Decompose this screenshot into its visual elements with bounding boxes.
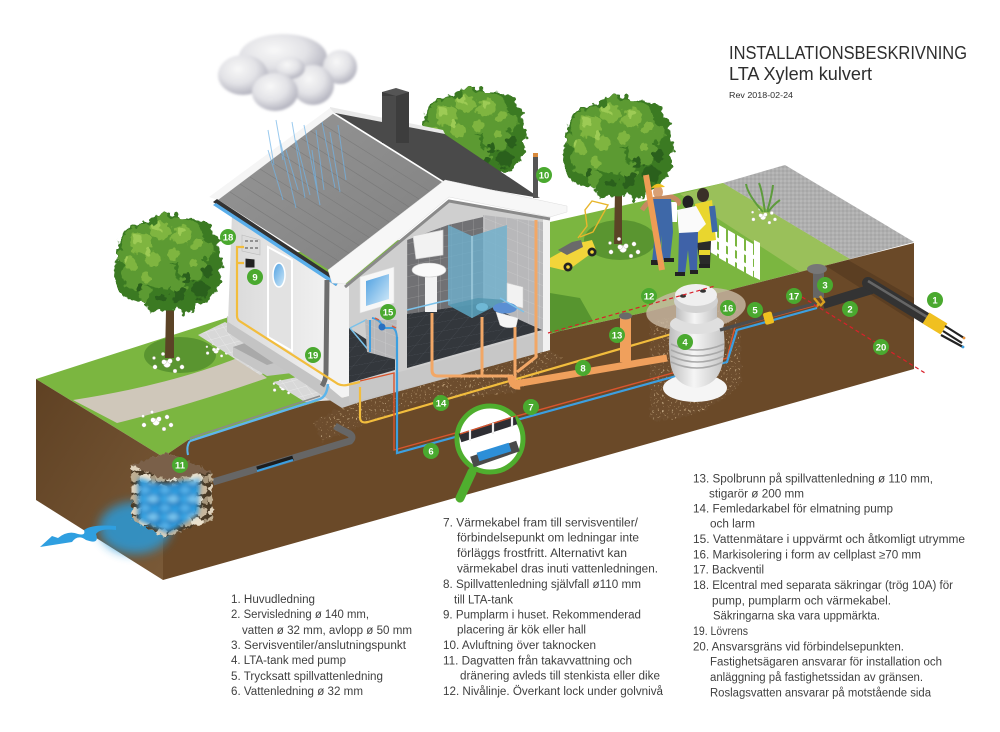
yellow coupling xyxy=(763,311,774,325)
rain xyxy=(268,120,346,208)
legend column 1: 1. Huvudledning xyxy=(231,594,315,606)
badge 1: 1 xyxy=(932,296,938,306)
LTA tank xyxy=(663,284,727,402)
worker in hi-vis xyxy=(695,188,716,268)
gravel road xyxy=(723,165,914,259)
cloud xyxy=(218,34,357,111)
badge 1 xyxy=(927,292,943,308)
badge 10: 10 xyxy=(539,170,549,182)
water pipe xyxy=(397,308,817,453)
title xyxy=(729,43,967,100)
badge 12: 12 xyxy=(644,292,654,302)
tree left of house xyxy=(115,213,223,373)
house: gable fascia xyxy=(328,180,567,284)
badge 19: 19 xyxy=(308,350,318,362)
power cable along wall and to tank xyxy=(237,247,675,422)
house: slab xyxy=(349,332,550,403)
legend column 3: 13. Spolbrunn på spillvattenledning ø 110 mm, xyxy=(693,473,933,485)
house: floor drain cup xyxy=(476,303,488,311)
legend column 2: placering är kök eller hall xyxy=(457,625,586,637)
level line xyxy=(548,286,715,333)
legend column 2: 10. Avluftning över taknocken xyxy=(443,640,596,652)
badge 5: 5 xyxy=(752,306,758,316)
house: front corner pillar xyxy=(330,277,349,398)
legend column 3: Säkringarna ska vara uppmärkta. xyxy=(713,611,880,623)
badge 9: 9 xyxy=(252,272,258,284)
badge 6 xyxy=(423,443,439,459)
badge 20 xyxy=(873,339,889,355)
ground: grass surface xyxy=(36,183,850,457)
house: right tile wall xyxy=(483,215,543,332)
legend column 3: Fastighetsägaren ansvarar för installation och xyxy=(710,657,942,669)
legend column 3: och larm xyxy=(710,519,755,531)
gravel bed around tank xyxy=(650,300,742,420)
badge 3: 3 xyxy=(822,280,828,292)
badge 11 xyxy=(172,457,188,473)
service valve post xyxy=(807,264,827,307)
heat cable xyxy=(360,305,817,450)
house: side wall xyxy=(228,214,332,388)
badge 16: 16 xyxy=(723,304,733,314)
badge 14 xyxy=(433,395,449,411)
legend column 2: till LTA-tank xyxy=(454,594,513,606)
legend column 1 xyxy=(231,594,412,698)
title: INSTALLATIONSBESKRIVNING xyxy=(729,43,967,63)
tree behind house xyxy=(421,87,527,190)
badge 2: 2 xyxy=(847,304,853,316)
legend column 3: 16. Markisolering i form av cellplast ≥70 mm xyxy=(693,549,921,561)
legend column 1: 3. Servisventiler/anslutningspunkt xyxy=(231,640,407,652)
house: mirror cabinet xyxy=(413,230,443,259)
ground: light lawn strip near gravel xyxy=(680,183,850,272)
badge 13: 13 xyxy=(612,330,622,342)
storm drain along ground xyxy=(187,384,328,455)
legend column 2: 12. Nivålinje. Överkant lock under golvnivå xyxy=(443,686,664,698)
house: downpipe xyxy=(322,280,327,386)
main pipe and service pipe xyxy=(823,281,965,348)
house: door xyxy=(268,247,292,351)
title: LTA Xylem kulvert xyxy=(729,64,872,84)
badge 9 xyxy=(247,269,263,285)
pavement and entrance steps xyxy=(198,322,337,402)
legend column 2: 11. Dagvatten från takavvattning och xyxy=(443,655,632,667)
number badges xyxy=(172,167,943,473)
fascia underside xyxy=(345,201,550,287)
legend column 2: förläggs frostfritt. Alternativt kan xyxy=(457,548,627,560)
house: dark tile wall xyxy=(407,217,483,314)
house: floor room 1 xyxy=(407,303,542,368)
house: right end wall xyxy=(543,218,550,352)
reed plant xyxy=(746,183,780,212)
house: foundation xyxy=(227,316,550,408)
house: pump alarm xyxy=(245,258,255,268)
stone chest xyxy=(131,453,213,537)
badge 17: 17 xyxy=(789,292,799,302)
legend column 2: 7. Värmekabel fram till servisventiler/ xyxy=(443,517,639,529)
house: roof ridge trim xyxy=(330,107,445,134)
badge 15 xyxy=(380,304,396,320)
badge 4 xyxy=(677,334,693,350)
white fence xyxy=(671,202,760,280)
outflow arrow xyxy=(40,526,116,547)
legend column 3: 17. Backventil xyxy=(693,565,764,577)
badge 3 xyxy=(817,277,833,293)
badge 17 xyxy=(786,288,802,304)
sewer pipe xyxy=(511,358,667,386)
badge 12 xyxy=(641,288,657,304)
badge 4: 4 xyxy=(682,338,688,348)
house: water meter niche xyxy=(365,318,397,360)
house: toilet xyxy=(493,283,523,328)
roof lines xyxy=(230,122,429,262)
ground insulation disc xyxy=(644,283,748,335)
house: gutter xyxy=(213,199,340,286)
garden path xyxy=(73,357,267,423)
orange drain pipes in house xyxy=(432,220,536,385)
legend column 3: stigarör ø 200 mm xyxy=(709,488,804,500)
badge 13 xyxy=(609,327,625,343)
legend column 3: 19. Lövrens xyxy=(693,626,748,638)
house: interior wall xyxy=(345,200,550,392)
badge 16 xyxy=(720,300,736,316)
legend column 3 xyxy=(693,473,965,699)
magnifier xyxy=(457,406,523,498)
house: electrical panel xyxy=(242,235,260,255)
badge 2 xyxy=(842,301,858,317)
badge 6: 6 xyxy=(428,446,434,458)
badge 14: 14 xyxy=(436,398,447,410)
legend column 3: pump, pumplarm och värmekabel. xyxy=(712,595,891,607)
badge 8: 8 xyxy=(580,364,586,374)
legend column 2: 8. Spillvattenledning självfall ø110 mm xyxy=(443,579,641,591)
legend column 3: 15. Vattenmätare i uppvärmt och åtkomligt utrymme xyxy=(693,534,965,546)
responsibility boundary line xyxy=(802,297,925,373)
soil: front face xyxy=(163,243,914,580)
legend column 3: anläggning på fastighetssidan av gränsen. xyxy=(710,672,923,684)
worker in white shirt xyxy=(675,196,706,276)
underground drain pipe xyxy=(213,426,352,482)
house: roof rake xyxy=(209,108,334,200)
ground: lawn shadow xyxy=(550,293,593,333)
legend column 2: värmekabel dras inuti vattenledningen. xyxy=(457,564,658,576)
legend column 1: vatten ø 32 mm, avlopp ø 50 mm xyxy=(242,625,412,637)
house: wash basin xyxy=(412,263,446,312)
house: chimney xyxy=(382,88,409,143)
flushing well riser xyxy=(619,312,632,362)
badge 19 xyxy=(305,347,321,363)
badge 18 xyxy=(220,229,236,245)
gravel bed under house xyxy=(313,350,562,442)
badge 20: 20 xyxy=(876,342,886,354)
badge 11: 11 xyxy=(175,460,186,472)
worker with pipe xyxy=(642,184,679,265)
badge 7 xyxy=(523,399,539,415)
legend column 3: 14. Femledarkabel för elmatning pump xyxy=(693,504,893,516)
legend column 1: 4. LTA-tank med pump xyxy=(231,655,346,667)
trench shadow xyxy=(826,260,914,322)
flowers xyxy=(141,208,777,431)
legend column 1: 5. Trycksatt spillvattenledning xyxy=(231,671,383,683)
house: shower glass xyxy=(448,225,507,318)
badge 8 xyxy=(575,360,591,376)
badge 18: 18 xyxy=(223,232,233,244)
legend column 3: 20. Ansvarsgräns vid förbindelsepunkten. xyxy=(693,641,904,653)
legend column 1: 2. Servisledning ø 140 mm, xyxy=(231,609,369,621)
house: window xyxy=(360,267,394,313)
pressure sewer xyxy=(720,303,817,330)
legend column 3: 18. Elcentral med separata säkringar (trög 10A) för xyxy=(693,580,953,592)
title: Rev 2018-02-24 xyxy=(729,90,793,100)
house: vent pipe xyxy=(533,153,538,198)
legend column 3: Roslagsvatten ansvarar på motstående sida xyxy=(710,687,932,699)
legend column 2: förbindelsepunkt om ledningar inte xyxy=(457,533,639,545)
lawn mower xyxy=(550,201,608,272)
house: roof dark slope xyxy=(330,110,540,198)
house: floor room 2 xyxy=(349,328,395,383)
legend column 1: 6. Vattenledning ø 32 mm xyxy=(231,686,363,698)
house xyxy=(209,88,567,408)
soil: left side xyxy=(36,379,163,580)
legend column 2: dränering avleds till stenkista eller dike xyxy=(460,671,660,683)
legend column 2: 9. Pumplarm i huset. Rekommenderad xyxy=(443,609,641,621)
badge 7: 7 xyxy=(528,402,534,414)
orange pipe carried xyxy=(646,175,662,270)
workers xyxy=(642,175,716,276)
badge 15: 15 xyxy=(383,308,394,318)
badge 10 xyxy=(536,167,552,183)
house: roof grey slope xyxy=(217,112,442,272)
tree right of house xyxy=(564,95,674,260)
badge 5 xyxy=(747,302,763,318)
legend column 2 xyxy=(443,517,664,698)
blue outflow splash xyxy=(99,502,171,554)
house: water pipes in wall xyxy=(350,298,524,353)
